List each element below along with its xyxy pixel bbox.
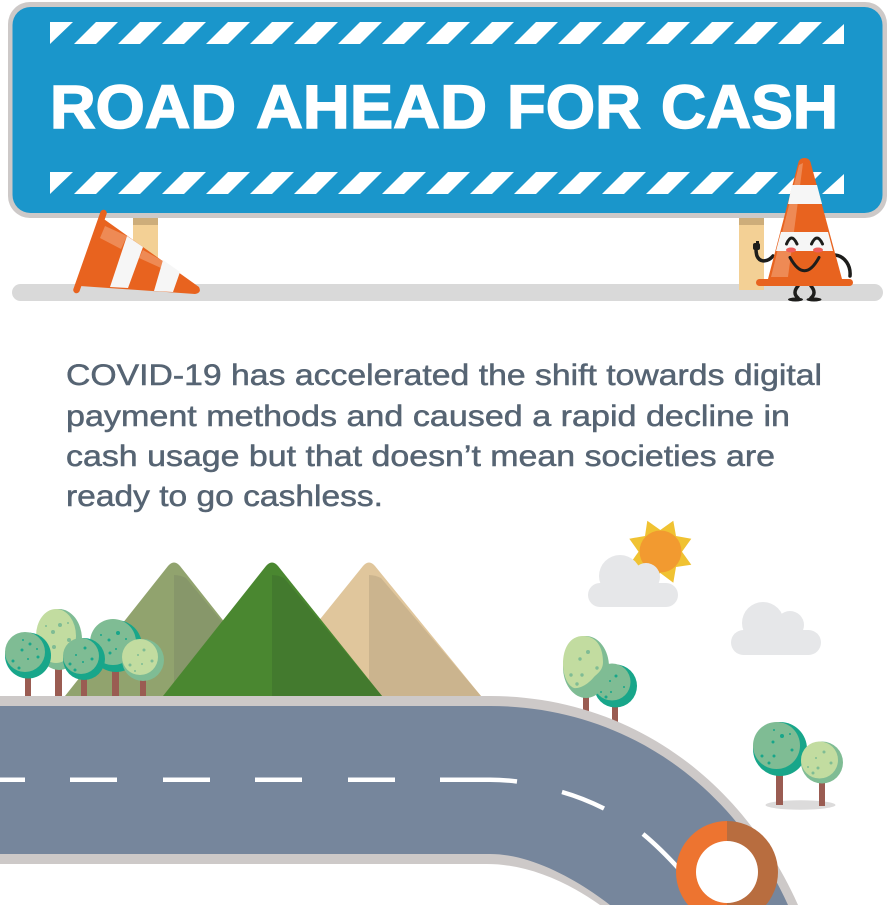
teal tree crown one — [5, 632, 51, 678]
road — [0, 696, 798, 905]
cone face — [786, 238, 823, 271]
khaki mountain — [65, 562, 283, 696]
teal tree crown two — [90, 619, 142, 672]
lane dashes — [0, 780, 680, 870]
intro paragraph: COVID-19 has accelerated the shift towards digital — [66, 359, 822, 392]
cone body — [768, 158, 842, 279]
intro paragraph: ready to go cashless. — [66, 480, 383, 513]
cone hand and feet — [753, 241, 822, 302]
sun — [629, 521, 691, 583]
cone arms and legs — [756, 249, 850, 298]
intro paragraph: payment methods and caused a rapid decline in — [66, 400, 790, 433]
sign title: AHEAD — [256, 73, 487, 141]
green mountain — [163, 562, 382, 696]
tree group left — [5, 609, 164, 696]
sign title: FOR — [507, 73, 641, 141]
road sign panel — [8, 2, 887, 218]
ground strip — [12, 284, 883, 301]
tan mountain — [258, 562, 481, 696]
fallen traffic cone — [76, 213, 200, 294]
left sign post — [133, 218, 158, 278]
top hazard stripes — [50, 22, 844, 44]
sign title: ROAD — [50, 73, 236, 141]
road kerb — [0, 696, 798, 905]
roadside tree pair on bend — [563, 636, 637, 724]
cloud right — [731, 602, 821, 655]
intro paragraph: cash usage but that doesn’t mean societies are — [66, 440, 775, 473]
bottom hazard stripes — [50, 172, 844, 194]
standing cone character — [753, 158, 853, 302]
tree shadow — [766, 800, 836, 810]
pale tree crown — [122, 639, 164, 681]
intro paragraph — [66, 359, 822, 513]
donut road marker — [676, 821, 778, 905]
right sign post — [739, 218, 764, 290]
tree trunks — [25, 668, 146, 696]
sign title: CASH — [661, 73, 838, 141]
road surface — [0, 706, 788, 905]
teal tree crown three — [63, 638, 105, 680]
tall pale tree crown — [36, 609, 82, 670]
cloud near sun — [588, 555, 678, 607]
tree pair with shadow — [753, 722, 843, 810]
